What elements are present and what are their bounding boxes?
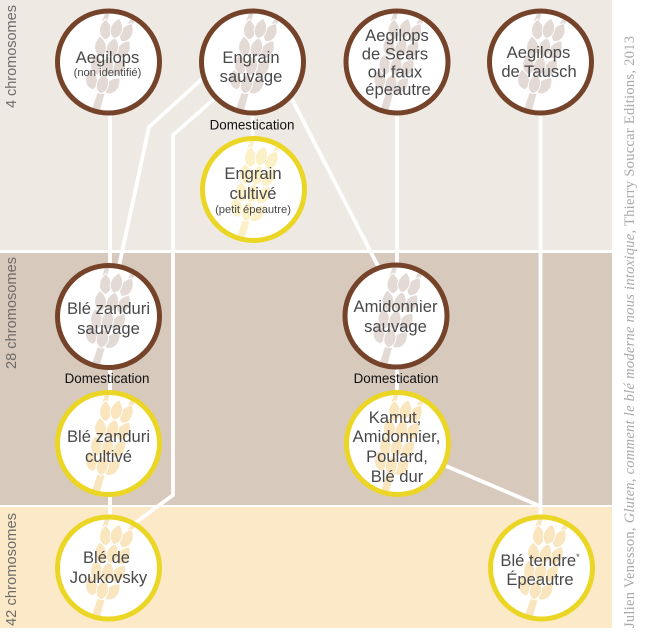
- node: Blé zanduri sauvage: sauvage: [77, 319, 140, 338]
- node: Amidonnier sauvage: [345, 265, 447, 367]
- node: Engrain cultivé: (petit épeautre): [215, 204, 291, 216]
- node: Aegilops de Sears: épeautre: [365, 80, 431, 99]
- node: Blé zanduri cultivé: cultivé: [85, 447, 132, 466]
- node: Aegilops non identifié: Aegilops: [76, 48, 139, 67]
- node: Aegilops non identifié: (non identifié): [74, 67, 142, 79]
- node: Engrain sauvage: sauvage: [220, 67, 282, 86]
- node: Blé zanduri cultivé: Blé zanduri: [67, 427, 150, 446]
- text: Domestication amidonnier: Domestication: [354, 371, 438, 386]
- node: Engrain sauvage: [202, 11, 304, 113]
- node: Blé tendre Épeautre: Épeautre: [506, 570, 574, 589]
- node: Blé de Joukovsky: Blé de: [83, 548, 130, 567]
- node: Kamut, Amidonnier, Poulard, Blé dur: Blé dur: [371, 467, 424, 486]
- node: Aegilops de Sears: [346, 11, 448, 113]
- band: 28 chromosomes: [0, 253, 612, 505]
- node: Kamut, Amidonnier, Poulard, Blé dur: Amidonnier,: [353, 427, 440, 446]
- node: Aegilops de Tausch: [490, 11, 592, 113]
- node: Blé tendre Épeautre: *: [576, 552, 580, 562]
- band: 4 chromosomes: [0, 0, 612, 250]
- node: Amidonnier sauvage: Amidonnier: [354, 297, 438, 316]
- label: 4 chromosomes: 4 chromosomes: [4, 5, 20, 108]
- node: Blé zanduri cultivé: [58, 392, 160, 494]
- node: Engrain cultivé: [202, 138, 304, 240]
- node: Aegilops de Sears: de Sears: [362, 44, 428, 64]
- node: Kamut, Amidonnier, Poulard, Blé dur: Poulard,: [366, 447, 428, 466]
- node: Blé zanduri sauvage: [58, 266, 160, 368]
- node: Blé zanduri sauvage: Blé zanduri: [67, 299, 150, 318]
- source credit: Julien Venesson, Gluten, comment le blé moderne nous intoxique, Thierry Souccar Editions, 2013: [622, 36, 638, 628]
- node: Kamut, Amidonnier, Poulard, Blé dur: [346, 392, 448, 494]
- node: Blé tendre Épeautre: [490, 517, 592, 619]
- node: Aegilops de Sears: ou faux: [368, 62, 423, 82]
- node: Blé tendre Épeautre: Blé tendre: [500, 551, 576, 570]
- node: Engrain cultivé: Engrain: [224, 164, 282, 183]
- node: Engrain sauvage: Engrain: [222, 48, 280, 67]
- node: Blé de Joukovsky: Joukovsky: [70, 568, 148, 587]
- band: 42 chromosomes: [0, 507, 612, 628]
- node: Aegilops de Sears: Aegilops: [365, 26, 429, 45]
- node: Blé de Joukovsky: [58, 517, 160, 619]
- node: Kamut, Amidonnier, Poulard, Blé dur: Kamut,: [369, 408, 421, 427]
- text: Domestication engrain: Domestication: [210, 118, 294, 132]
- label: 28 chromosomes: 28 chromosomes: [4, 257, 20, 369]
- node: Aegilops de Tausch: de Tausch: [501, 62, 577, 81]
- node: Amidonnier sauvage: sauvage: [364, 317, 427, 336]
- node: Aegilops de Tausch: Aegilops: [507, 43, 570, 62]
- text: Domestication zanduri: Domestication: [65, 371, 149, 386]
- label: 42 chromosomes: 42 chromosomes: [4, 513, 20, 626]
- connecting lines: [110, 78, 540, 523]
- node: Aegilops non identifié: [58, 11, 160, 113]
- node: Engrain cultivé: cultivé: [229, 184, 277, 203]
